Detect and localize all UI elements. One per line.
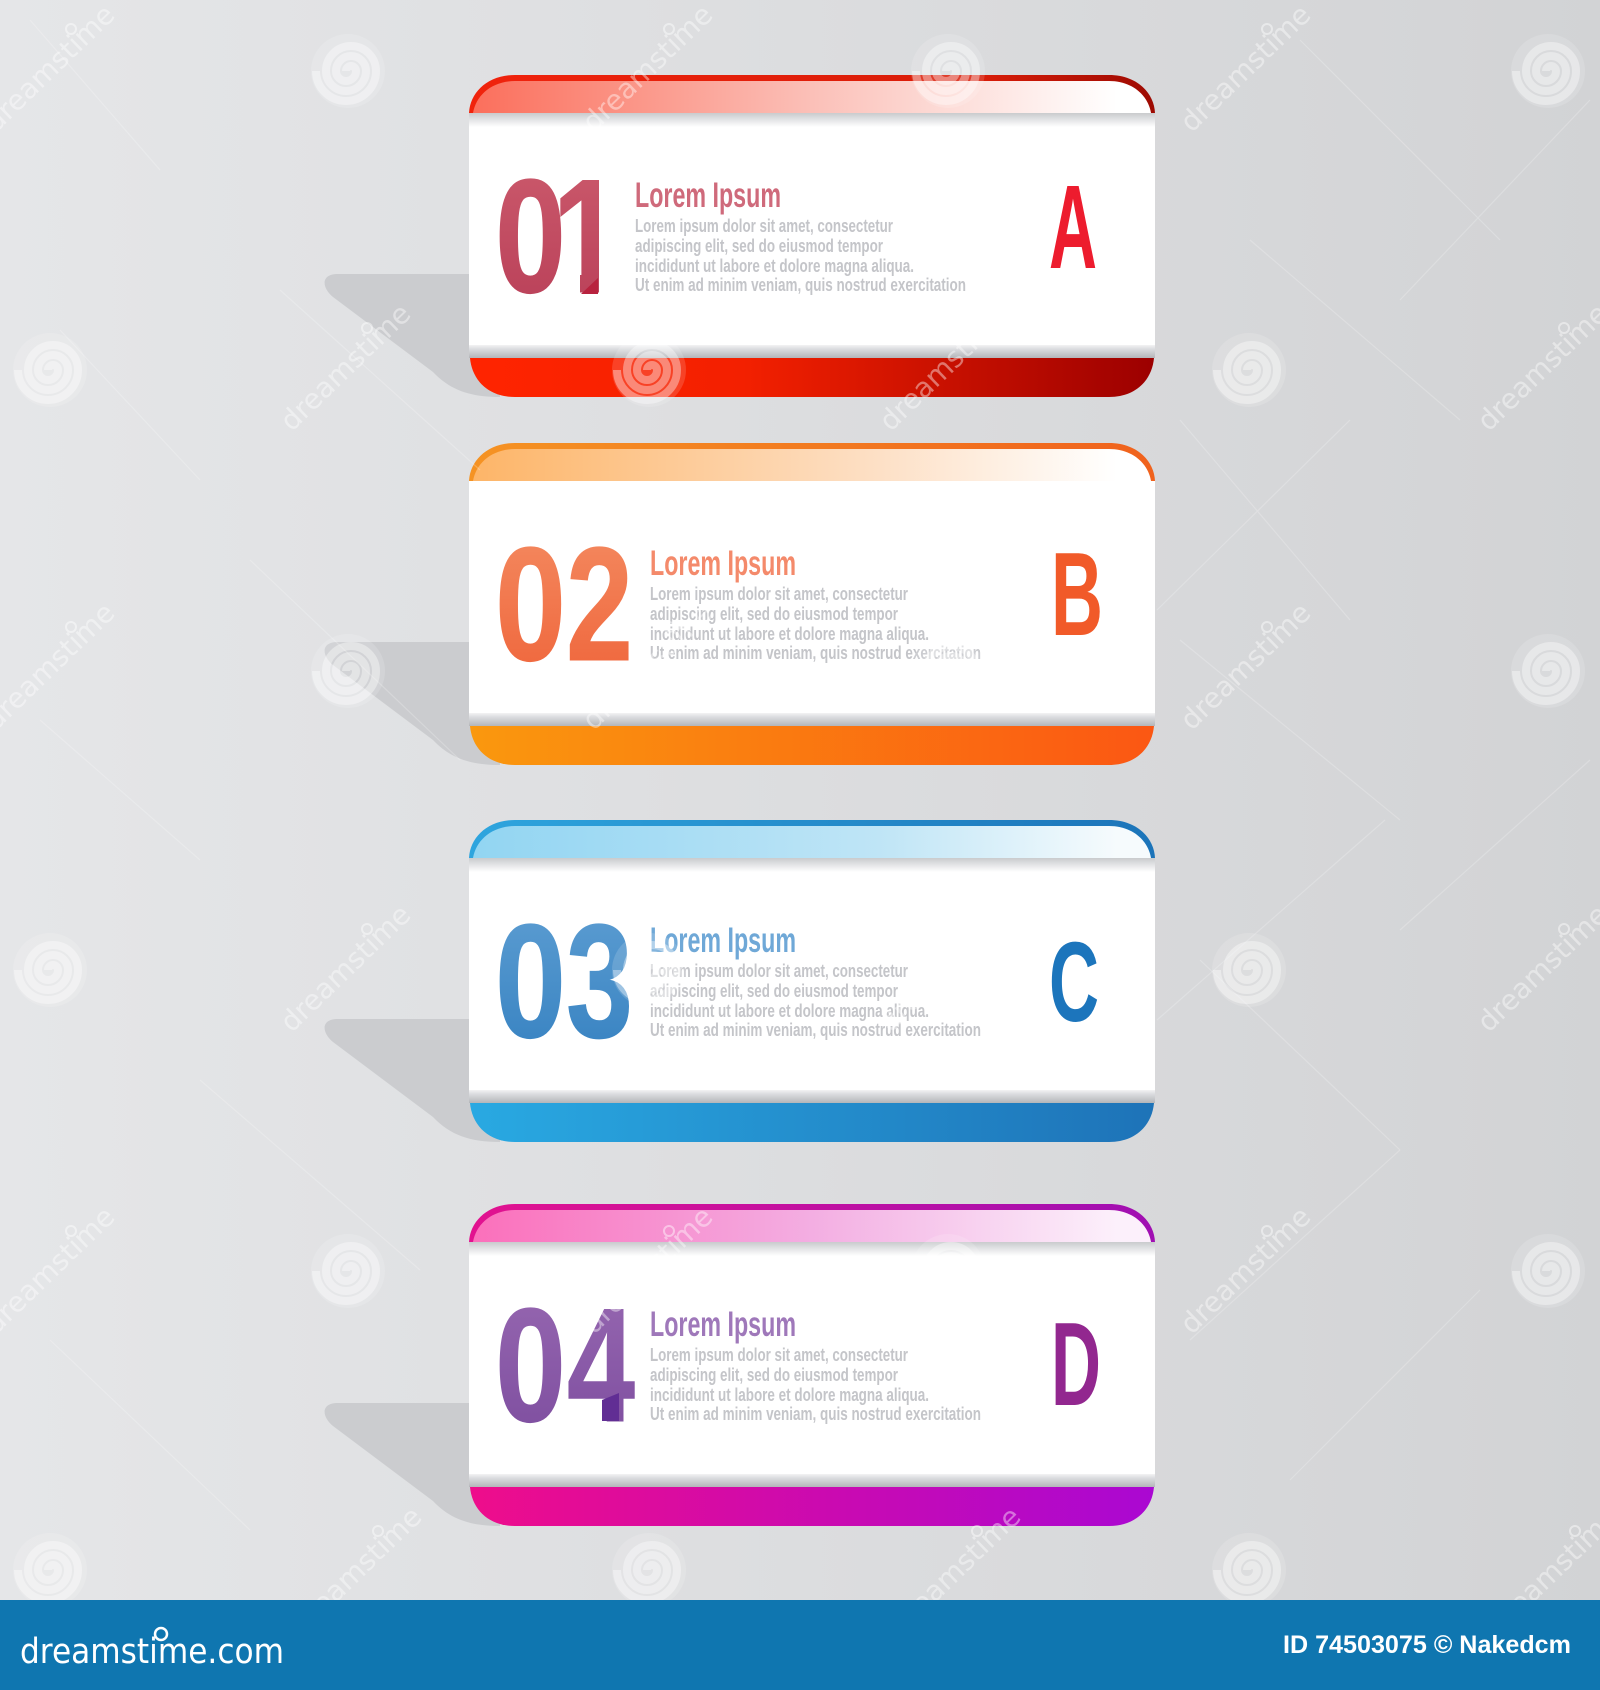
title: Lorem Ipsum: [650, 544, 796, 583]
white body: [469, 481, 1155, 726]
number 02: [495, 514, 633, 695]
body text: Lorem ipsum dolor sit amet, consectetur: [635, 215, 893, 236]
white body: [469, 858, 1155, 1103]
panel: card 02: [469, 443, 1155, 765]
number 04: 0: [495, 1275, 566, 1456]
body text: Ut enim ad minim veniam, quis nostrud exercitation: [650, 642, 981, 663]
title: Lorem Ipsum: [635, 176, 781, 215]
body text: incididunt ut labore et dolore magna aliqua.: [650, 1000, 929, 1021]
number 03: 0: [495, 891, 566, 1072]
footer bar: [0, 1600, 1600, 1690]
watermark: dreamstime text: dreamstime: [1174, 596, 1317, 736]
number 02: 0: [495, 514, 566, 695]
number 04: [495, 1275, 635, 1456]
watermark: dreamstime text: dreamstime: [576, 0, 719, 138]
body text: Lorem ipsum dolor sit amet, consectetur: [650, 1344, 908, 1365]
title: Lorem Ipsum: [650, 1305, 796, 1344]
body text: Lorem ipsum dolor sit amet, consectetur: [650, 960, 908, 981]
footer logo: dreamstime.com: [20, 1632, 284, 1672]
shadow: card 2: [325, 642, 500, 765]
watermark: dreamstime text: dreamstime: [873, 297, 1016, 437]
panel: card 04: [469, 1204, 1155, 1526]
watermark: dreamstime text: dreamstime: [1174, 0, 1317, 138]
letter C: C: [1049, 919, 1099, 1045]
number 03: [495, 891, 633, 1072]
body text: incididunt ut labore et dolore magna aliqua.: [650, 623, 929, 644]
bottom band: [470, 1487, 1154, 1526]
top band: [469, 443, 1155, 481]
body text: Ut enim ad minim veniam, quis nostrud exercitation: [650, 1403, 981, 1424]
body text: Ut enim ad minim veniam, quis nostrud exercitation: [650, 1019, 981, 1040]
watermark: dreamstime text: dreamstime: [274, 297, 417, 437]
body text: incididunt ut labore et dolore magna aliqua.: [635, 255, 914, 276]
number 02: 2: [566, 514, 633, 695]
number 01: 1: [552, 146, 623, 327]
shadow: card 1: [325, 274, 500, 397]
shadow: card 4: [325, 1403, 500, 1526]
letter D: D: [1051, 1298, 1101, 1431]
body text: [635, 215, 966, 295]
white body: [469, 113, 1155, 358]
watermark: dreamstime text: dreamstime: [274, 898, 417, 1038]
body text: adipiscing elit, sed do eiusmod tempor: [650, 1364, 898, 1385]
body text: adipiscing elit, sed do eiusmod tempor: [635, 235, 883, 256]
body text: [650, 583, 981, 663]
shadow: card 3: [325, 1019, 500, 1142]
number 03: 3: [566, 891, 633, 1072]
bottom band: [470, 358, 1154, 397]
watermark: dreamstime text: dreamstime: [884, 1500, 1027, 1640]
letter A: A: [1049, 161, 1097, 294]
panel: card 01: [469, 75, 1155, 397]
watermark: dreamstime text: dreamstime: [285, 1500, 428, 1640]
body text: Lorem ipsum dolor sit amet, consectetur: [650, 583, 908, 604]
watermark: dreamstime text: dreamstime: [873, 898, 1016, 1038]
watermark: dreamstime text: dreamstime: [576, 1200, 719, 1340]
top band: [469, 820, 1155, 858]
number 01: 0: [495, 146, 566, 327]
watermark: dreamstime text: dreamstime: [1174, 1200, 1317, 1340]
title: Lorem Ipsum: [650, 921, 796, 960]
top band: [469, 75, 1155, 113]
top band: [469, 1204, 1155, 1242]
body text: Ut enim ad minim veniam, quis nostrud exercitation: [635, 274, 966, 295]
white body: [469, 1242, 1155, 1487]
body text: [650, 1344, 981, 1424]
body text: incididunt ut labore et dolore magna aliqua.: [650, 1384, 929, 1405]
watermark: dreamstime text: dreamstime: [576, 596, 719, 736]
number 01: [500, 178, 599, 294]
letter B: B: [1051, 528, 1103, 661]
panel: card 03: [469, 820, 1155, 1142]
body text: adipiscing elit, sed do eiusmod tempor: [650, 603, 898, 624]
body text: [650, 960, 981, 1040]
footer credit: ID 74503075 © Nakedcm: [1283, 1631, 1571, 1659]
body text: adipiscing elit, sed do eiusmod tempor: [650, 980, 898, 1001]
bottom band: [470, 1103, 1154, 1142]
number 04: 4: [567, 1275, 635, 1456]
bottom band: [470, 726, 1154, 765]
